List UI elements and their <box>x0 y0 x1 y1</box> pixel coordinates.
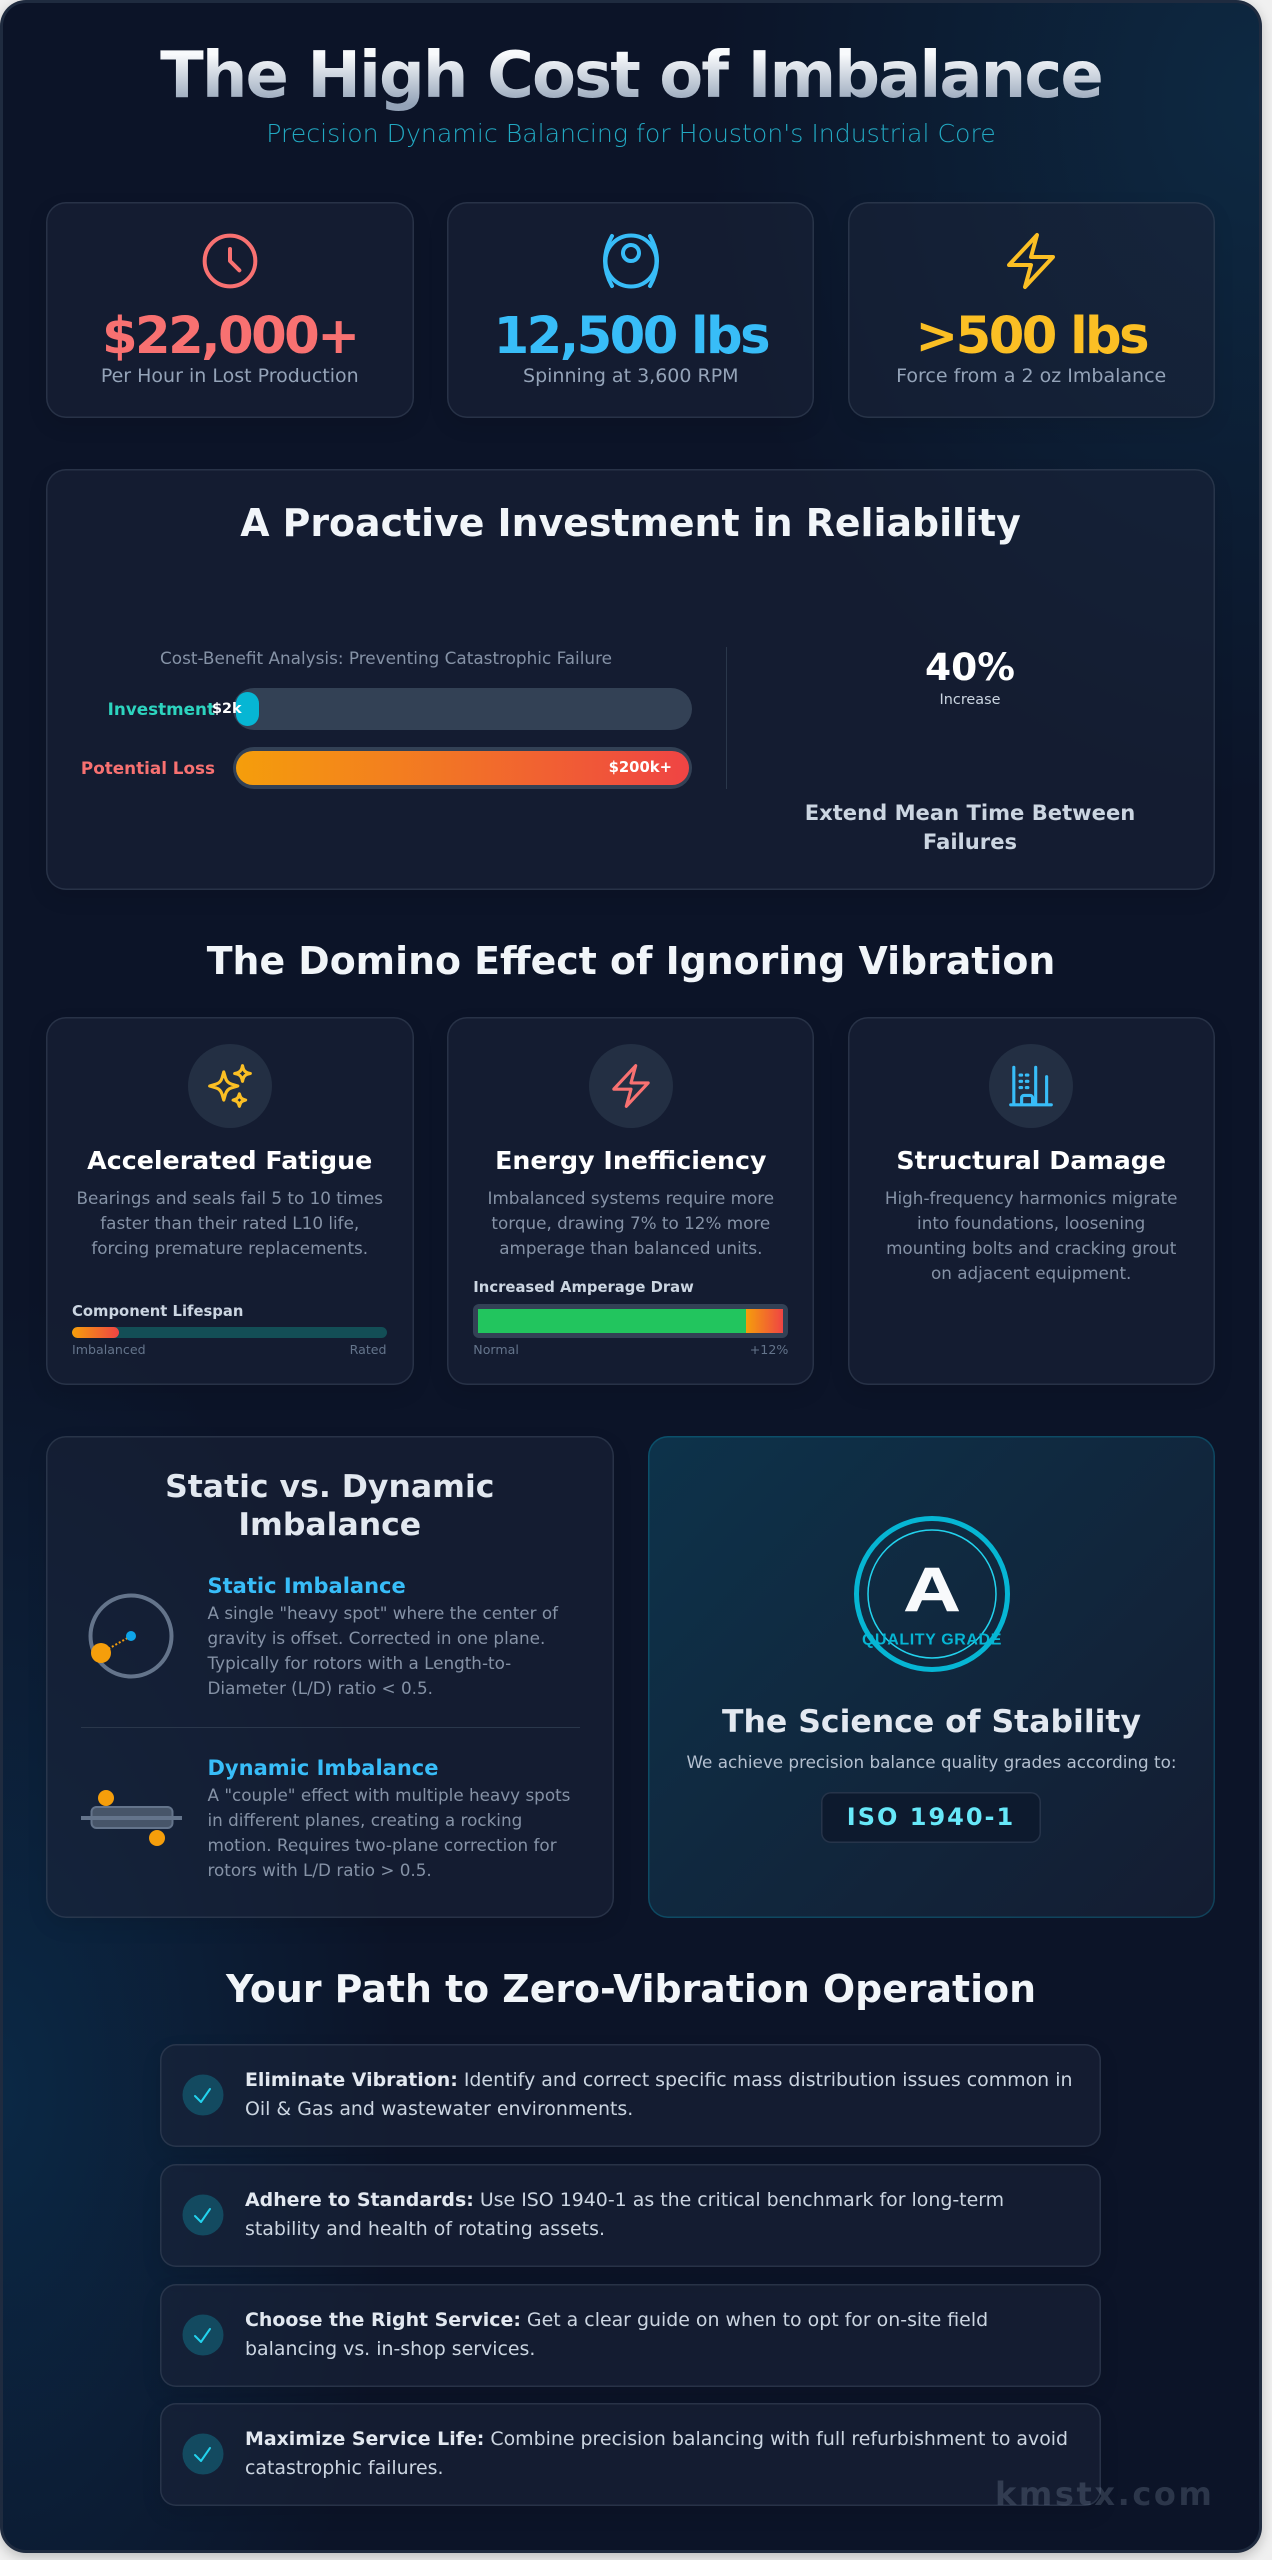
static text: A single "heavy spot" where the center of <box>208 1602 558 1622</box>
dynamic text: motion. Requires two-plane correction for <box>208 1835 557 1855</box>
card text: forcing premature replacements. <box>91 1238 368 1258</box>
stat description <box>805 800 1135 854</box>
dynamic text <box>208 1784 570 1880</box>
heading: The Science of Stability <box>722 1704 1141 1740</box>
title: The High Cost of Imbalance <box>160 39 1102 113</box>
chart label: Increased Amperage Draw <box>473 1279 694 1296</box>
icon: check <box>182 2314 224 2356</box>
card heading: Accelerated Fatigue <box>87 1146 372 1175</box>
panel: accelerated fatigue <box>46 1017 414 1385</box>
stat label: Force from a 2 oz Imbalance <box>896 365 1166 387</box>
card text: Imbalanced systems require more <box>488 1188 774 1208</box>
step text: balancing vs. in-shop services. <box>245 2338 535 2360</box>
amperage excess segment <box>746 1309 783 1333</box>
watermark: kmstx.com <box>995 2475 1214 2513</box>
static text <box>207 1602 558 1698</box>
lifespan bar fill <box>72 1327 119 1338</box>
static text: Diameter (L/D) ratio < 0.5. <box>208 1678 433 1698</box>
step text <box>245 2189 1004 2240</box>
stat value: $22,000+ <box>102 306 358 366</box>
bar label: potential loss: Potential Loss <box>81 758 215 778</box>
heading: path: Your Path to Zero-Vibration Operation <box>226 1967 1036 2011</box>
subtitle: Precision Dynamic Balancing for Houston's Industrial Core <box>266 119 996 148</box>
step: eliminate vibration <box>160 2044 1101 2147</box>
card text: on adjacent equipment. <box>931 1263 1131 1283</box>
badge: quality grade A: A <box>903 1556 960 1625</box>
step text <box>245 2309 988 2360</box>
amperage normal segment <box>478 1309 746 1333</box>
card text <box>885 1188 1178 1283</box>
step text <box>245 2069 1072 2120</box>
panel: stat force <box>848 202 1215 418</box>
card text: mounting bolts and cracking grout <box>886 1238 1176 1258</box>
panel: energy inefficiency <box>447 1017 814 1385</box>
step: choose the right service <box>160 2284 1101 2387</box>
icon: bolt <box>1007 232 1055 290</box>
card text <box>488 1188 774 1258</box>
lifespan bar <box>72 1327 387 1338</box>
dynamic title: Dynamic Imbalance <box>208 1756 438 1780</box>
panel: static vs dynamic <box>46 1436 614 1918</box>
card text: amperage than balanced units. <box>499 1238 762 1258</box>
stat value: 12,500 lbs <box>494 306 768 366</box>
panel: stat lost production <box>46 202 414 418</box>
icon: dynamic imbalance <box>81 1790 182 1846</box>
axis label: rated: Rated <box>350 1342 386 1357</box>
heading: Imbalance <box>238 1506 421 1542</box>
step text: stability and health of rotating assets. <box>245 2218 605 2240</box>
panel: structural damage <box>848 1017 1215 1385</box>
icon: check <box>182 2194 224 2236</box>
card heading: Energy Inefficiency <box>495 1146 767 1175</box>
text: We achieve precision balance quality grades according to: <box>686 1752 1177 1772</box>
step text: Adhere to Standards: Use ISO 1940-1 as the critical benchmark for long-term <box>245 2189 1004 2211</box>
icon: bolt <box>589 1044 673 1128</box>
card text: torque, drawing 7% to 12% more <box>491 1213 770 1233</box>
card text: Bearings and seals fail 5 to 10 times <box>77 1188 383 1208</box>
heading: A Proactive Investment in Reliability <box>240 501 1021 545</box>
static text: gravity is offset. Corrected in one plane. <box>208 1628 545 1648</box>
stat: 40%: 40% <box>925 645 1015 689</box>
standard box <box>821 1792 1041 1843</box>
icon: sparkles <box>188 1044 272 1128</box>
icon: check <box>182 2074 224 2116</box>
bar value: $200k+: $200k+ <box>609 759 672 776</box>
step text: Choose the Right Service: Get a clear guide on when to opt for on-site field <box>245 2309 988 2331</box>
stat caption: Increase <box>940 692 1000 708</box>
heading <box>165 1469 494 1542</box>
static text: Typically for rotors with a Length-to- <box>208 1653 511 1673</box>
bar: potential loss track <box>233 747 692 789</box>
card text: High-frequency harmonics migrate <box>885 1188 1178 1208</box>
panel: proactive investment <box>46 469 1215 890</box>
axis label: normal: Normal <box>473 1342 519 1357</box>
dynamic text: rotors with L/D ratio > 0.5. <box>208 1860 432 1880</box>
panel: science of stability <box>648 1436 1215 1918</box>
amperage bar <box>473 1304 788 1338</box>
card text: faster than their rated L10 life, <box>100 1213 359 1233</box>
badge: quality grade A: QUALITY GRADE <box>862 1632 1001 1648</box>
icon: check <box>182 2434 224 2474</box>
heading: Static vs. Dynamic <box>165 1469 494 1505</box>
dynamic text: A "couple" effect with multiple heavy spots <box>208 1784 570 1804</box>
static title: Static Imbalance <box>208 1574 406 1598</box>
icon: static imbalance <box>88 1594 174 1678</box>
bar value: $2k: $2k <box>212 701 242 717</box>
bar fill: investment <box>236 692 259 726</box>
stat label: Per Hour in Lost Production <box>101 365 359 387</box>
axis label: +12%: +12% <box>750 1342 788 1357</box>
panel: stat rotor mass <box>447 202 814 418</box>
step text: Eliminate Vibration: Identify and correct specific mass distribution issues common in <box>245 2069 1072 2091</box>
chart label: Component Lifespan <box>72 1303 243 1320</box>
icon: clock <box>202 234 258 288</box>
bar fill: potential loss <box>236 751 689 785</box>
badge: quality grade A <box>854 1516 1010 1672</box>
step text: Maximize Service Life: Combine precision balancing with full refurbishment to avoid <box>245 2428 1068 2450</box>
step text: catastrophic failures. <box>245 2457 444 2479</box>
card text: into foundations, loosening <box>917 1213 1145 1233</box>
standard box: ISO 1940-1 <box>847 1803 1015 1831</box>
step: adhere to standards <box>160 2164 1101 2267</box>
dynamic text: in different planes, creating a rocking <box>208 1810 522 1830</box>
icon: rotor <box>603 234 659 288</box>
axis label: imbalanced: Imbalanced <box>72 1342 146 1357</box>
card text <box>77 1188 383 1258</box>
stat description: Failures <box>923 829 1017 854</box>
chart caption: Cost-Benefit Analysis: Preventing Catastrophic Failure <box>160 648 612 668</box>
bar label: investment: Investment <box>108 699 215 719</box>
heading: domino effect: The Domino Effect of Ignoring Vibration <box>207 939 1055 983</box>
step text <box>245 2428 1068 2479</box>
bar: investment track <box>233 688 692 730</box>
stat label: Spinning at 3,600 RPM <box>523 365 739 387</box>
step: maximize service life <box>160 2403 1101 2506</box>
step text: Oil & Gas and wastewater environments. <box>245 2098 633 2120</box>
stat description: Extend Mean Time Between <box>805 800 1135 825</box>
stat value: >500 lbs <box>915 306 1147 366</box>
icon: building <box>989 1044 1073 1128</box>
card heading: Structural Damage <box>896 1146 1166 1175</box>
